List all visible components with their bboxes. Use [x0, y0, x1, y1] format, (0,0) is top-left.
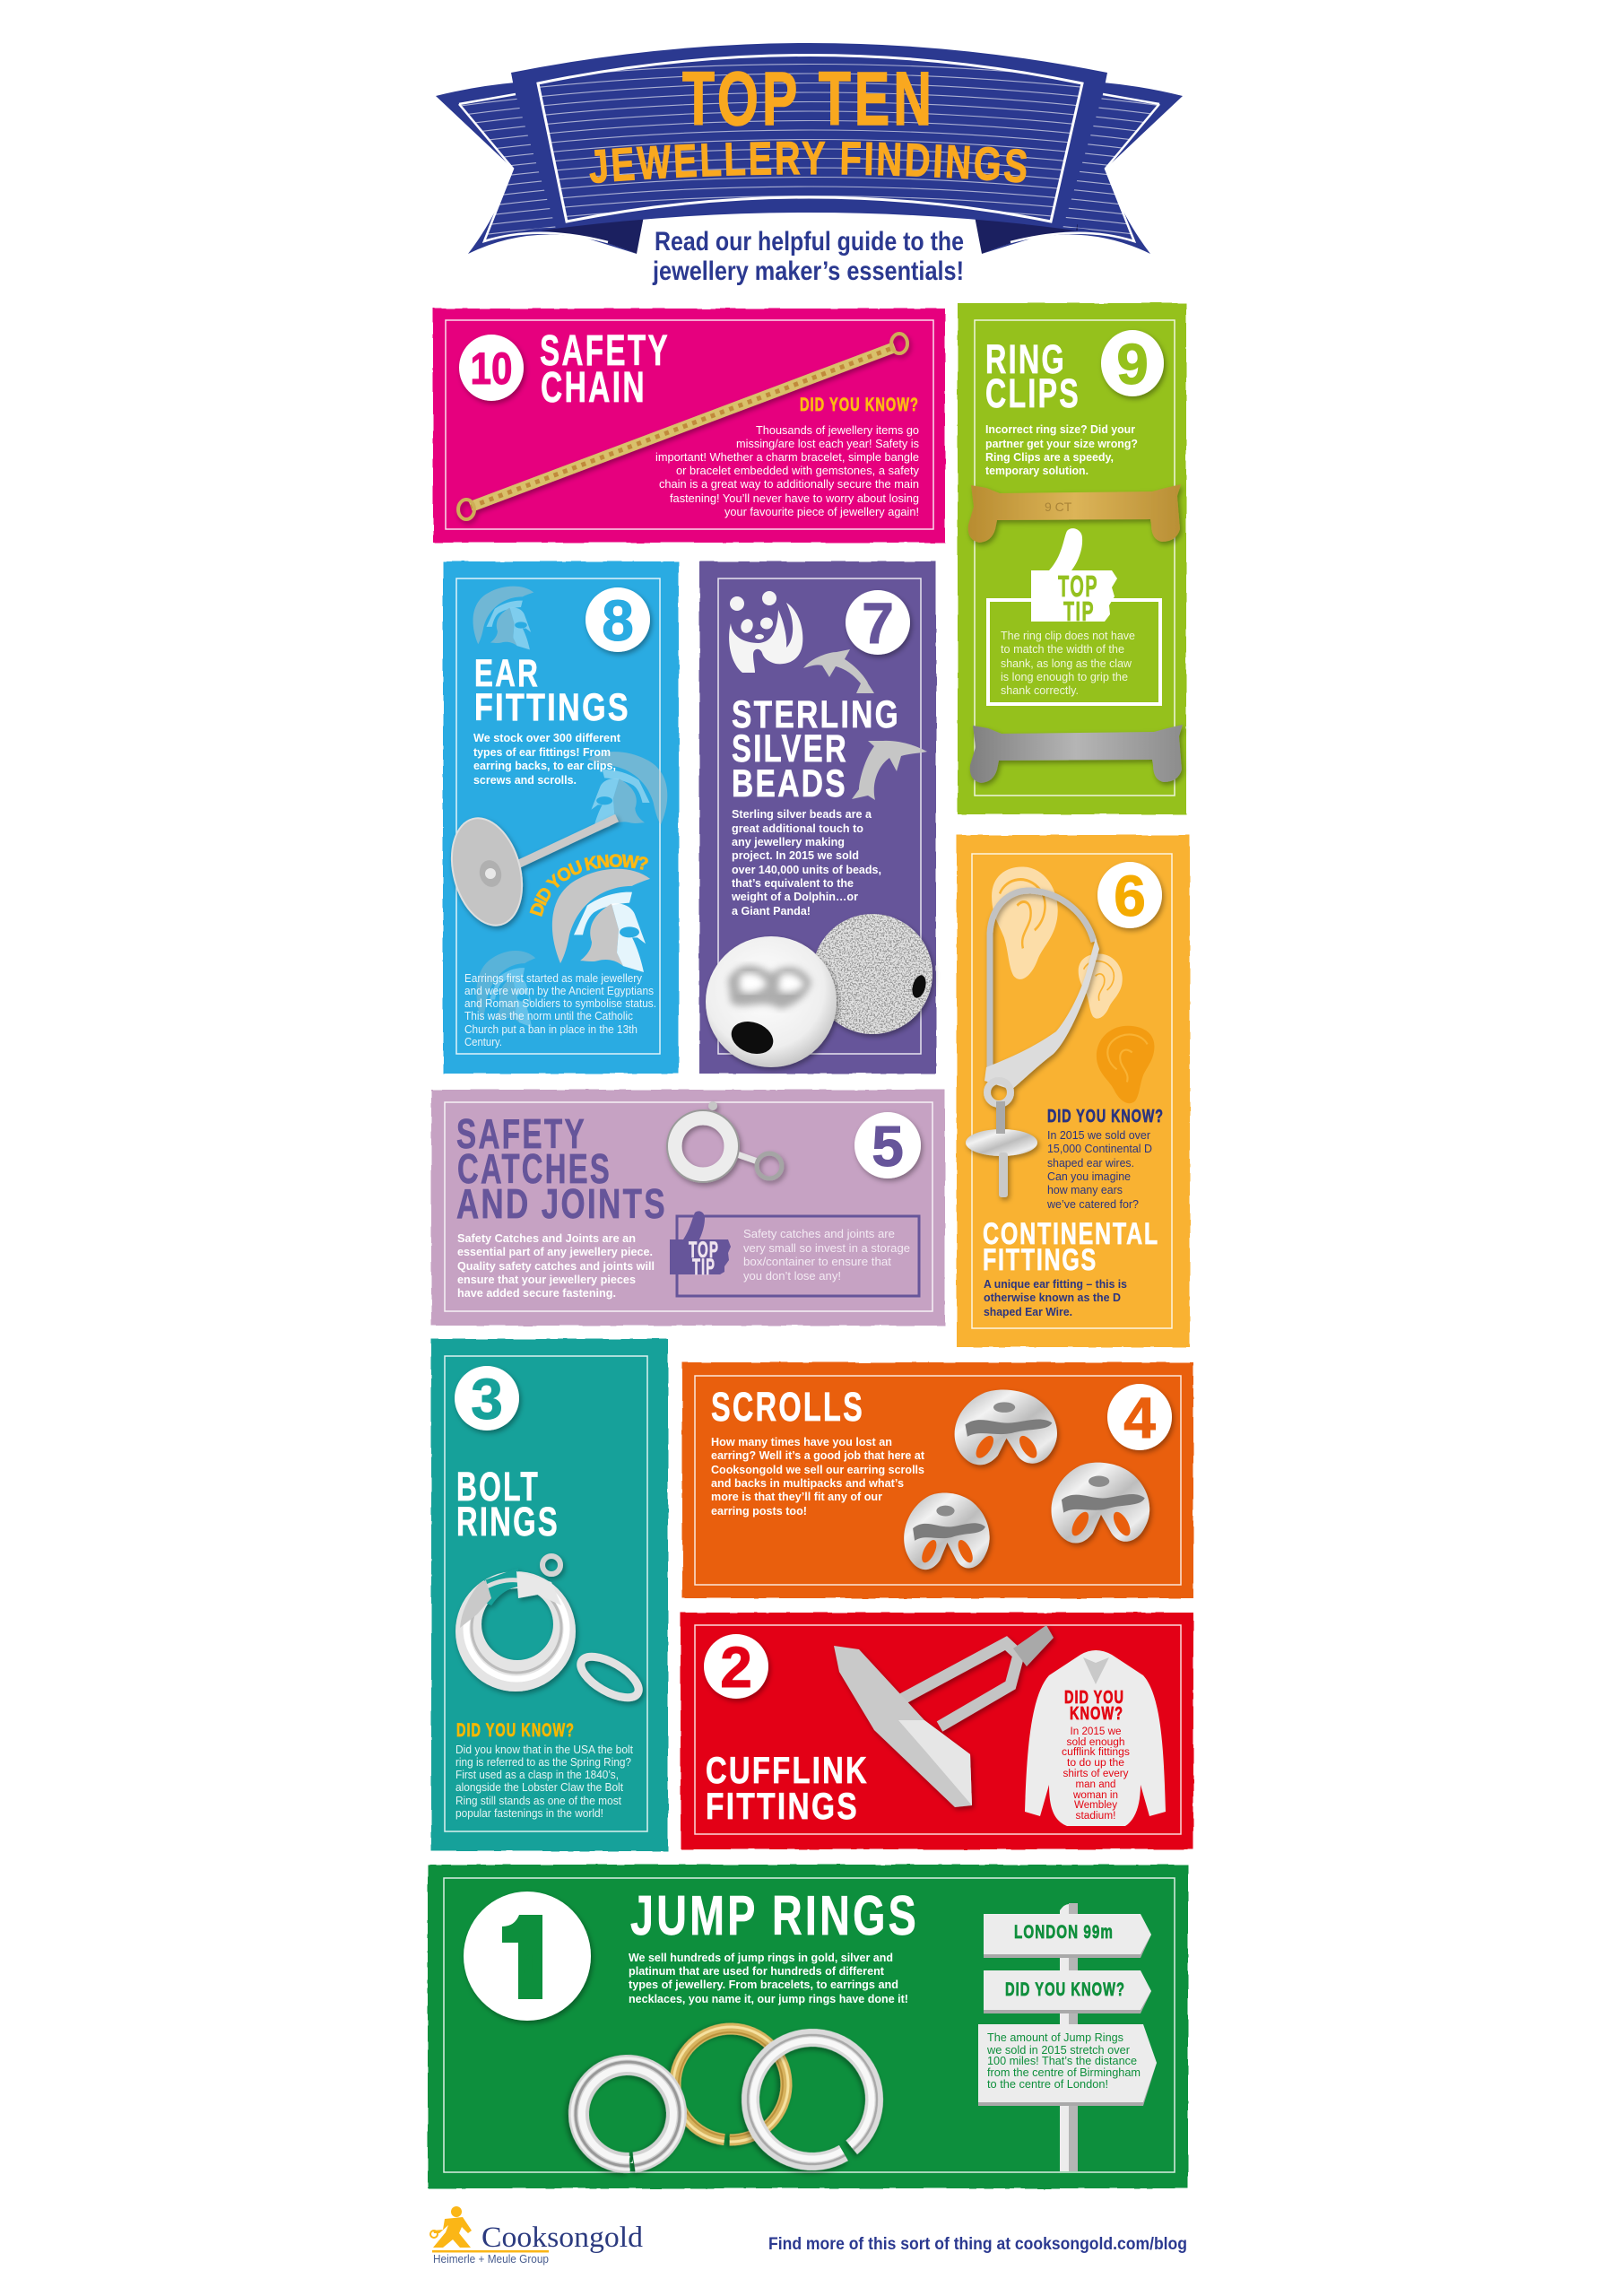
- intro text: Cooksongold we sell our earring scrolls: [711, 1464, 924, 1476]
- scroll photo bottom: [904, 1493, 990, 1570]
- did you know text: First used as a clasp in the 1840’s,: [455, 1769, 619, 1781]
- top tip text: The ring clip does not have: [1001, 630, 1135, 642]
- top tip label: TOP: [1058, 570, 1098, 603]
- heading: [540, 327, 670, 412]
- top tip text: Safety catches and joints are: [743, 1228, 895, 1240]
- intro text: a Giant Panda!: [732, 905, 811, 918]
- sign: fact text: [978, 2024, 1157, 2106]
- banner left tail: [436, 83, 637, 254]
- ear wire photo: [966, 891, 1099, 1197]
- number badge 3: 3: [471, 1367, 503, 1431]
- intro text: [457, 1232, 655, 1300]
- sign: did you know: DID YOU KNOW?: [1005, 1979, 1125, 2000]
- number badge 1: 1: [523, 1950, 537, 1979]
- shirt with did you know: Wembley: [1074, 1800, 1117, 1811]
- intro text: ensure that your jewellery pieces: [457, 1274, 636, 1286]
- silver jump ring right: [724, 2012, 900, 2187]
- intro text: partner get your size wrong?: [985, 438, 1138, 450]
- heading: [732, 693, 900, 805]
- gold jump ring: [667, 2021, 794, 2148]
- intro text: We stock over 300 different: [473, 732, 621, 744]
- heading: EAR: [474, 652, 540, 695]
- icon: dolphin two: [852, 741, 927, 800]
- stardust bead: [812, 914, 932, 1034]
- signpost: [978, 1903, 1157, 2171]
- shirt with did you know: In 2015 we: [1071, 1726, 1121, 1737]
- did you know text: fastening! You’ll never have to worry about losing: [670, 492, 919, 505]
- top tip label: TIP: [1063, 596, 1095, 627]
- did you know text: chain is a great way to additionally secure the main: [659, 478, 919, 491]
- did you know text: or bracelet embedded with gemstones, a safety: [676, 465, 920, 477]
- did you know text: [455, 1744, 634, 1820]
- icon: thumbs up: [670, 1211, 731, 1274]
- logo: cooksongold: [430, 2206, 644, 2266]
- shirt with did you know: sold enough: [1067, 1737, 1124, 1748]
- heading: CATCHES: [457, 1145, 612, 1192]
- heading: [706, 1749, 869, 1827]
- banner right tail: [982, 83, 1183, 254]
- did you know text: Did you know that in the USA the bolt: [455, 1744, 634, 1756]
- did you know text: Earrings first started as male jewellery: [464, 972, 643, 985]
- number badge 5: [854, 1112, 921, 1178]
- intro text: types of ear fittings! From: [473, 746, 611, 759]
- panel: 10 safety chain: [433, 309, 945, 543]
- safety catch photo: [667, 1101, 782, 1182]
- sign: london: [984, 1914, 1151, 1958]
- intro text: earring posts too!: [711, 1505, 807, 1518]
- number badge 8: [585, 587, 650, 653]
- number badge 4: 4: [1123, 1386, 1156, 1450]
- intro text: Incorrect ring size? Did your: [985, 423, 1135, 436]
- top tip text: shank, as long as the claw: [1001, 657, 1132, 670]
- intro text: weight of a Dolphin…or: [731, 891, 858, 903]
- smooth bead: [706, 936, 837, 1067]
- shirt with did you know: woman in: [1072, 1790, 1118, 1801]
- heading: RINGS: [456, 1499, 559, 1544]
- icon: orange ear three: [1097, 1026, 1154, 1103]
- sign: fact text: The amount of Jump Rings: [987, 2031, 1123, 2044]
- heading: BEADS: [732, 762, 847, 805]
- intro text: temporary solution.: [985, 465, 1089, 477]
- heading: [983, 1217, 1159, 1277]
- heading: [456, 1464, 559, 1544]
- did you know text: popular fastenings in the world!: [455, 1807, 603, 1820]
- heading: SAFETY: [540, 327, 670, 375]
- intro text: essential part of any jewellery piece.: [457, 1246, 653, 1258]
- panel: 8 ear fittings: [443, 561, 680, 1074]
- number badge 10: 10: [470, 344, 513, 394]
- sign: did you know: [984, 1970, 1151, 2013]
- ear post photo: [440, 811, 617, 933]
- icon: pale ear two: [1079, 953, 1123, 1019]
- intro text: types of jewellery. From bracelets, to earrings and: [629, 1979, 898, 1991]
- intro text: Safety Catches and Joints are an: [457, 1232, 636, 1245]
- heading: [474, 652, 630, 729]
- bolt ring photo: [455, 1556, 645, 1706]
- top tip label: TIP: [692, 1255, 716, 1280]
- number badge 2: [704, 1634, 768, 1700]
- did you know text: 15,000 Continental D: [1047, 1143, 1152, 1155]
- intro text: earring? Well it’s a good job that here at: [711, 1449, 925, 1462]
- top tip box: [988, 600, 1160, 704]
- heading: SILVER: [732, 727, 848, 770]
- did you know heading: DID YOU KNOW?: [800, 395, 919, 415]
- did you know text: [1046, 1129, 1152, 1211]
- intro text: [731, 808, 881, 918]
- heading: CONTINENTAL: [983, 1217, 1159, 1251]
- icon: dolphin one: [803, 649, 874, 693]
- number badge 9: [1101, 330, 1164, 396]
- scroll photo right: [1051, 1463, 1149, 1544]
- did you know text: and Roman Soldiers to symbolise status.: [464, 997, 656, 1010]
- did you know heading: DID YOU KNOW?: [1047, 1107, 1164, 1126]
- icon: panda: [729, 591, 802, 673]
- icon: pale ear one: [992, 867, 1058, 979]
- intro text: great additional touch to: [732, 822, 863, 835]
- icon: faded helmet bottom: [477, 951, 535, 1027]
- intro text: [711, 1436, 925, 1518]
- intro text: that’s equivalent to the: [732, 877, 854, 890]
- did you know text: ring is referred to as the Spring Ring?: [455, 1756, 631, 1769]
- shirt with did you know: shirts of every: [1063, 1769, 1129, 1779]
- panel: 3 bolt rings: [431, 1339, 668, 1851]
- intro text: We sell hundreds of jump rings in gold, silver and: [629, 1952, 893, 1964]
- gold ring clip: [968, 484, 1181, 543]
- heading: FITTINGS: [474, 686, 630, 729]
- intro text: and backs in multipacks and what’s: [711, 1477, 904, 1490]
- subtitle: Read our helpful guide to the: [655, 227, 964, 257]
- intro text: screws and scrolls.: [473, 774, 577, 787]
- top tip text: shank correctly.: [1001, 684, 1079, 697]
- icon: figure with key: [430, 2206, 472, 2248]
- panel: 5 safety catches and joints: [431, 1090, 945, 1326]
- sign: fact text: from the centre of Birmingham: [987, 2066, 1141, 2079]
- did you know curved heading: DID YOU KNOW?: [529, 854, 648, 917]
- did you know text: and were worn by the Ancient Egyptians: [464, 985, 654, 997]
- heading: SCROLLS: [711, 1384, 864, 1430]
- heading: SAFETY: [456, 1110, 586, 1157]
- panel: 9 ring clips: [958, 303, 1186, 814]
- number badge 2: 2: [720, 1635, 752, 1700]
- silver ring clip: [970, 725, 1183, 783]
- scroll photo top: [955, 1389, 1057, 1465]
- intro text: Sterling silver beads are a: [732, 808, 872, 821]
- title: top ten: TOP TEN: [682, 57, 935, 141]
- heading: CHAIN: [541, 364, 646, 412]
- intro text: A unique ear fitting – this is: [984, 1278, 1127, 1291]
- number badge 1: [464, 1892, 591, 2021]
- did you know text: how many ears: [1047, 1184, 1123, 1196]
- panel: 2 cufflink fittings: [681, 1613, 1193, 1849]
- intro text: [629, 1952, 908, 2005]
- did you know heading: DID YOU KNOW?: [456, 1720, 575, 1741]
- banner main: [511, 43, 1107, 230]
- heading: [985, 336, 1080, 416]
- top tip text: [1001, 630, 1135, 697]
- heading: FITTINGS: [706, 1785, 859, 1827]
- did you know text: This was the norm until the Catholic: [464, 1010, 633, 1022]
- number badge 10: [459, 335, 524, 401]
- top tip text: to match the width of the: [1001, 643, 1124, 656]
- gold ring clip: 9 CT: [1045, 500, 1072, 514]
- panel: 1 jump rings: [428, 1865, 1188, 2188]
- top tip text: box/container to ensure that: [743, 1256, 892, 1268]
- title: jewellery findings: JEWELLERY FINDINGS: [589, 142, 1027, 183]
- intro text: shaped Ear Wire.: [984, 1306, 1072, 1318]
- shirt with did you know: [1025, 1650, 1166, 1826]
- number badge 4: [1107, 1384, 1172, 1450]
- heading: [456, 1110, 667, 1227]
- intro text: [985, 423, 1138, 477]
- intro text: any jewellery making: [732, 836, 845, 848]
- did you know text: Thousands of jewellery items go: [756, 424, 919, 437]
- shirt with did you know: man and: [1076, 1779, 1115, 1790]
- heading: BOLT: [456, 1464, 540, 1509]
- shirt with did you know: stadium!: [1076, 1811, 1115, 1822]
- number badge 9: 9: [1116, 332, 1149, 396]
- did you know text: your favourite piece of jewellery again!: [724, 506, 919, 518]
- heading: CLIPS: [985, 370, 1080, 416]
- logo: cooksongold: Heimerle + Meule Group: [433, 2253, 549, 2266]
- heading: CUFFLINK: [706, 1749, 869, 1791]
- number badge 5: 5: [872, 1114, 904, 1178]
- intro text: project. In 2015 we sold: [732, 849, 859, 862]
- sign: fact text: we sold in 2015 stretch over: [986, 2044, 1130, 2057]
- number badge 7: [846, 590, 910, 656]
- intro text: have added secure fastening.: [457, 1287, 616, 1300]
- heading: FITTINGS: [983, 1243, 1097, 1277]
- did you know text: Century.: [464, 1036, 502, 1048]
- panel: 6 continental fittings: [957, 835, 1190, 1347]
- intro text: necklaces, you name it, our jump rings have done it!: [629, 1993, 908, 2005]
- shirt with did you know: cufflink fittings: [1062, 1747, 1130, 1758]
- intro text: earring backs, to ear clips,: [473, 760, 616, 772]
- top tip label: [1058, 570, 1098, 627]
- number badge 7: 7: [862, 591, 894, 656]
- shirt with did you know: to do up the: [1067, 1758, 1124, 1769]
- did you know text: alongside the Lobster Claw the Bolt: [455, 1781, 623, 1794]
- top tip text: [743, 1228, 910, 1283]
- intro text: over 140,000 units of beads,: [732, 864, 881, 876]
- top tip text: you don’t lose any!: [743, 1270, 841, 1283]
- subtitle: [652, 227, 964, 286]
- panel: 7 sterling silver beads: [699, 561, 936, 1074]
- silver jump ring left: [570, 2057, 685, 2171]
- subtitle: jewellery maker’s essentials!: [652, 257, 964, 286]
- heading: RING: [985, 336, 1066, 382]
- sign: london: LONDON 99m: [1014, 1922, 1114, 1943]
- sign: fact text: 100 miles! That’s the distance: [987, 2055, 1137, 2067]
- icon: thumbs up: [1031, 528, 1117, 622]
- chain photo: [458, 334, 907, 519]
- number badge 6: 6: [1114, 864, 1146, 928]
- did you know text: In 2015 we sold over: [1047, 1129, 1150, 1142]
- icon: faded helmet middle: [587, 752, 667, 831]
- top tip label: [689, 1238, 719, 1280]
- top tip text: very small so invest in a storage: [743, 1242, 910, 1255]
- did you know text: Can you imagine: [1047, 1170, 1131, 1183]
- intro text: Quality safety catches and joints will: [457, 1260, 655, 1273]
- icon: big helmet: [552, 869, 650, 972]
- intro text: more is that they’ll fit any of our: [711, 1491, 882, 1503]
- did you know text: Church put a ban in place in the 13th: [464, 1023, 638, 1036]
- shirt with did you know: KNOW?: [1070, 1704, 1123, 1724]
- number badge 3: [455, 1366, 519, 1431]
- heading: STERLING: [732, 693, 900, 736]
- logo: cooksongold: Cooksongold: [481, 2222, 644, 2254]
- did you know text: [655, 424, 920, 518]
- did you know text: [464, 972, 656, 1048]
- heading: JUMP RINGS: [630, 1885, 919, 1947]
- top tip text: is long enough to grip the: [1001, 671, 1128, 683]
- did you know text: we’ve catered for?: [1046, 1198, 1139, 1211]
- shirt with did you know: DID YOU: [1064, 1688, 1124, 1708]
- icon: faded helmet top: [473, 587, 533, 649]
- top tip box: [677, 1216, 919, 1296]
- intro text: otherwise known as the D: [984, 1292, 1121, 1304]
- heading: AND JOINTS: [456, 1180, 667, 1227]
- did you know text: important! Whether a charm bracelet, simple bangle: [655, 451, 919, 464]
- intro text: platinum that are used for hundreds of different: [629, 1965, 885, 1978]
- panel: 4 scrolls: [682, 1362, 1193, 1598]
- intro text: [473, 732, 621, 787]
- intro text: Ring Clips are a speedy,: [985, 451, 1114, 464]
- did you know text: missing/are lost each year! Safety is: [736, 438, 919, 450]
- did you know text: shaped ear wires.: [1047, 1157, 1134, 1170]
- cufflink photo: [834, 1625, 1054, 1807]
- sign: fact text: to the centre of London!: [987, 2078, 1108, 2091]
- did you know text: Ring still stands as one of the most: [455, 1795, 621, 1807]
- title banner: [436, 43, 1183, 254]
- banner folds: [541, 216, 1078, 254]
- footer link text: Find more of this sort of thing at cooksongold.com/blog: [768, 2235, 1187, 2254]
- number badge 8: 8: [602, 588, 634, 653]
- number badge 6: [1097, 862, 1162, 928]
- top tip label: TOP: [689, 1238, 719, 1263]
- intro text: How many times have you lost an: [711, 1436, 892, 1448]
- intro text: [984, 1278, 1127, 1318]
